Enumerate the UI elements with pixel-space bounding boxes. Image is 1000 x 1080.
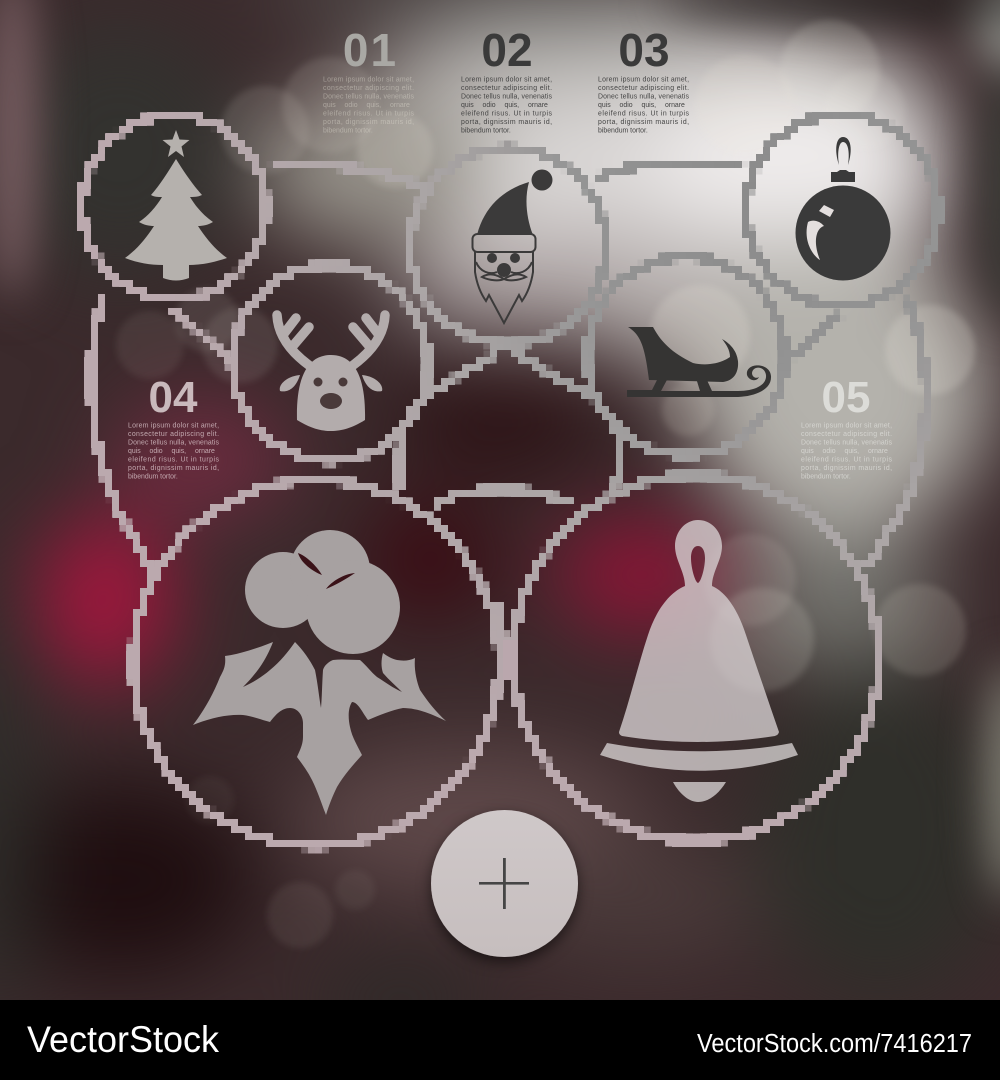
outline: connector tree to santa: [270, 164, 425, 187]
text block 02: [461, 76, 553, 134]
outline: connector santa to ornament: [597, 163, 745, 178]
text block 03: Lorem ipsum dolor sit amet,: [598, 76, 689, 84]
text block 02: quis odio quis, ornare: [461, 102, 548, 109]
number 05: 05: [822, 373, 870, 422]
text block 05: porta, dignissim mauris id,: [801, 465, 892, 472]
text block 05: consectetur adipiscing elit.: [801, 431, 892, 438]
text block 01: eleifend risus. Ut in turpis: [323, 110, 415, 118]
number 01: 01: [343, 24, 398, 76]
text block 03: consectetur adipiscing elit.: [598, 85, 689, 92]
text block 04: bibendum tortor.: [128, 474, 178, 480]
text block 04: [128, 422, 220, 480]
text block 02: consectetur adipiscing elit.: [461, 85, 552, 92]
step 02: [461, 24, 553, 134]
text block 01: [323, 76, 415, 134]
text block 05: quis odio quis, ornare: [801, 448, 888, 455]
text block 02: bibendum tortor.: [461, 128, 511, 134]
text block 01: quis odio quis, ornare: [323, 102, 410, 109]
text block 03: [598, 76, 690, 134]
text block 02: porta, dignissim mauris id,: [461, 119, 552, 126]
icon: ornament: [796, 137, 890, 280]
block joining the large circles: [503, 640, 518, 680]
text block 04: quis odio quis, ornare: [128, 448, 215, 455]
icon: reindeer: [277, 315, 385, 431]
icon: sleigh: [627, 327, 771, 397]
text block 04: Lorem ipsum dolor sit amet,: [128, 422, 219, 430]
outline: bell circle: [513, 475, 879, 841]
outline: holly circle: [133, 480, 499, 846]
text block 05: [801, 422, 893, 480]
outline: reindeer circle: [232, 265, 428, 461]
number 04: 04: [149, 373, 198, 422]
text block 05: eleifend risus. Ut in turpis: [801, 456, 893, 464]
plus button: [431, 810, 578, 957]
icon: bell: [600, 520, 798, 802]
background bokeh lights: [116, 20, 975, 948]
text block 05: Lorem ipsum dolor sit amet,: [801, 422, 892, 430]
number 02: 02: [481, 24, 533, 76]
text block 03: porta, dignissim mauris id,: [598, 119, 689, 126]
text block 01: consectetur adipiscing elit.: [323, 85, 414, 92]
footer: brand: VectorStock: [27, 1018, 219, 1060]
text block 05: bibendum tortor.: [801, 474, 851, 480]
text block 01: Lorem ipsum dolor sit amet,: [323, 76, 414, 84]
outline: ornament circle: [746, 114, 938, 306]
footer: image id: VectorStock.com/7416217: [697, 1030, 972, 1058]
text block 03: bibendum tortor.: [598, 128, 648, 134]
text block 05: Donec tellus nulla, venenatis: [801, 440, 893, 446]
text block 01: bibendum tortor.: [323, 128, 373, 134]
text block 02: Lorem ipsum dolor sit amet,: [461, 76, 552, 84]
outline: wedge between large circles: [497, 600, 522, 680]
number 03: 03: [618, 24, 670, 76]
outline: santa circle: [410, 148, 606, 344]
icon: christmas tree: [125, 130, 227, 280]
text block 04: porta, dignissim mauris id,: [128, 465, 219, 472]
outline: tree circle: [82, 115, 266, 299]
text block 04: eleifend risus. Ut in turpis: [128, 456, 220, 464]
text block 03: quis odio quis, ornare: [598, 102, 685, 109]
text block 04: consectetur adipiscing elit.: [128, 431, 219, 438]
footer bar: [0, 1000, 1000, 1080]
text block 02: eleifend risus. Ut in turpis: [461, 110, 553, 118]
icon: santa: [472, 170, 552, 323]
text block 01: porta, dignissim mauris id,: [323, 119, 414, 126]
text block 01: Donec tellus nulla, venenatis: [323, 94, 415, 100]
outline: pin 04: [91, 298, 230, 572]
step 04: [128, 373, 220, 480]
step 05: [801, 373, 893, 480]
icon: holly: [193, 530, 446, 815]
outline: sleigh circle: [587, 257, 785, 455]
step 03: [598, 24, 690, 134]
pixelated outline network: [82, 114, 938, 846]
outline: central shape: [399, 353, 621, 492]
text block 04: Donec tellus nulla, venenatis: [128, 440, 220, 446]
step 01: [323, 24, 415, 134]
outline: lower connector arc: [433, 489, 570, 505]
text block 02: Donec tellus nulla, venenatis: [461, 94, 553, 100]
text block 03: Donec tellus nulla, venenatis: [598, 94, 690, 100]
outline: pin 05: [793, 298, 926, 570]
text block 03: eleifend risus. Ut in turpis: [598, 110, 690, 118]
